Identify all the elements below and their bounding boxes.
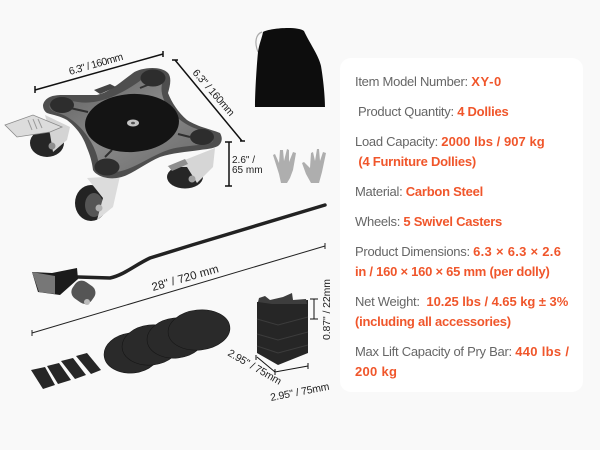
dimension: block width — [256, 355, 331, 404]
plate ribs — [70, 84, 190, 157]
spec: dimensions — [355, 244, 561, 279]
right caster — [167, 148, 215, 188]
dimension: block height — [310, 279, 333, 340]
dimension: pry bar length — [32, 243, 325, 336]
spec: load capacity: Load Capacity: 2000 lbs / 907 kg — [355, 134, 545, 149]
pry bar wheel — [68, 277, 99, 307]
dimension: dolly height: 2.6" / — [232, 155, 255, 166]
dimension: dolly height: 65 mm — [232, 165, 263, 176]
dimension: block width: 2.95" / 75mm — [269, 381, 331, 404]
spec: dimensions: Product Dimensions: 6.3 × 6.3 × 2.6 — [355, 244, 561, 259]
spec: net weight: Net Weight: 10.25 lbs / 4.65 kg ± 3% — [355, 294, 568, 309]
icon: drawstring bag — [255, 28, 325, 107]
spec: net weight: (including all accessories) — [355, 314, 511, 329]
dimension: dolly depth: 6.3" / 160mm — [190, 67, 237, 119]
dimension: block depth: 2.95" / 75mm — [226, 347, 284, 388]
spec: net weight — [355, 294, 568, 329]
spec: load capacity — [355, 134, 545, 169]
dimension: dolly depth — [172, 60, 245, 141]
spec: material: Material: Carbon Steel — [355, 184, 483, 199]
spec: model: Item Model Number: XY-0 — [355, 74, 502, 89]
icon: moving pads — [102, 307, 232, 376]
front caster — [75, 176, 120, 221]
icon: pry bar — [32, 205, 325, 307]
back left caster — [5, 115, 70, 157]
dimension: dolly width: 6.3" / 160mm — [68, 51, 125, 78]
plate — [43, 68, 222, 178]
spec: pry bar capacity — [355, 344, 569, 379]
icon: stacked blocks — [257, 293, 308, 365]
spec: pry bar capacity: 200 kg — [355, 364, 397, 379]
icon: dolly — [5, 68, 222, 221]
panel: specifications — [340, 58, 583, 392]
spec: quantity: Product Quantity: 4 Dollies — [358, 104, 508, 119]
spec: wheels: Wheels: 5 Swivel Casters — [355, 214, 502, 229]
pry bar head — [32, 268, 78, 295]
icon: velcro strips — [31, 353, 101, 389]
dimension: pry bar length: 28" / 720 mm — [151, 263, 220, 294]
spec: pry bar capacity: Max Lift Capacity of Pry Bar: 440 lbs / — [355, 344, 569, 359]
dimension: block height: 0.87" / 22mm — [321, 279, 333, 340]
rubber feet — [140, 70, 166, 86]
dimension: dolly height — [225, 142, 263, 186]
spec: load capacity: (4 Furniture Dollies) — [358, 154, 476, 169]
icon: gloves — [273, 149, 326, 183]
center disc — [84, 92, 180, 154]
spec: dimensions: in / 160 × 160 × 65 mm (per dolly) — [355, 264, 550, 279]
grip tab — [94, 84, 116, 94]
dimension: dolly width — [35, 51, 163, 93]
